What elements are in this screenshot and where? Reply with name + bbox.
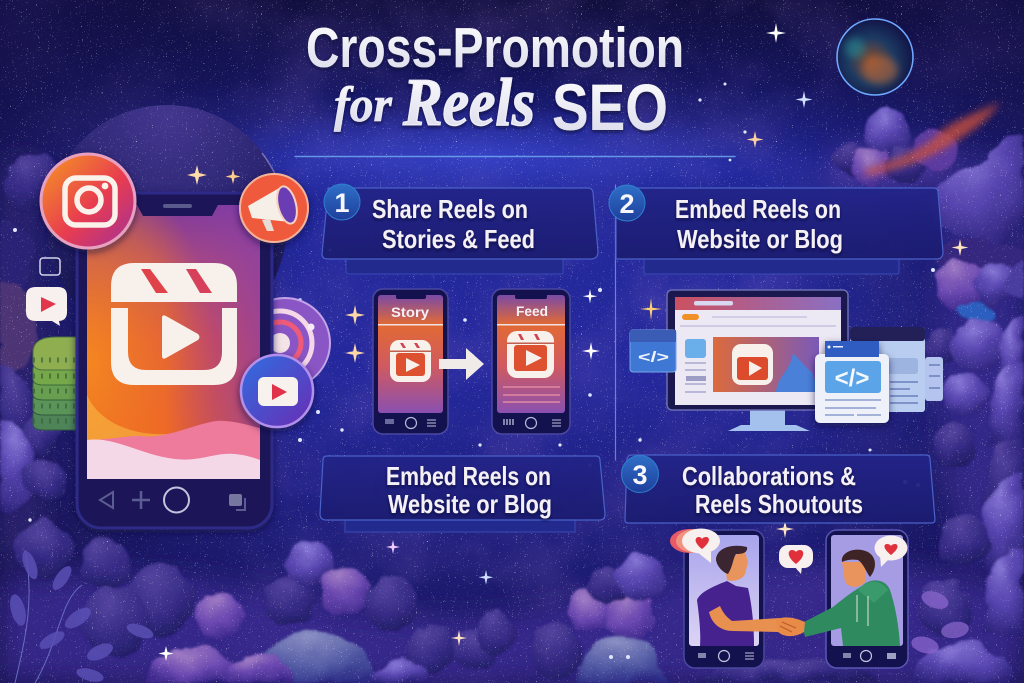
- feed phone: [492, 289, 570, 434]
- story phone: Story: [391, 304, 429, 320]
- phone screen artwork: [87, 205, 260, 479]
- icon: Instagram badge: [41, 154, 135, 248]
- planet behind the phone: [47, 105, 287, 345]
- handshake: [776, 617, 805, 636]
- title: for: [334, 76, 393, 132]
- badge 2: [609, 185, 645, 221]
- icon: coin stack: [33, 337, 78, 430]
- icon: purple target disc: [240, 298, 330, 388]
- panel: embed reels (left column): [320, 456, 605, 532]
- heart speech bubbles: [670, 528, 908, 574]
- monitor stand: [728, 410, 810, 431]
- clouds: upper right: [833, 108, 1024, 285]
- small moon planet: [837, 19, 913, 95]
- clouds: right side: [912, 259, 1024, 683]
- title: Reels: [402, 64, 535, 140]
- left collaboration phone: [684, 530, 764, 668]
- embedded reels icon: [732, 344, 773, 385]
- panel 2: embed reels on website or blog: [609, 185, 943, 274]
- orange nebula streak: [865, 102, 1000, 176]
- center bubble: [779, 545, 813, 574]
- heading: Embed Reels on: [386, 461, 551, 491]
- panel 3: collaborations and shoutouts: [622, 455, 935, 523]
- phone nav bar: [100, 488, 245, 512]
- title: SEO: [552, 70, 668, 144]
- heading: Website or Blog: [388, 489, 552, 519]
- arrow: story to feed: [439, 348, 484, 380]
- Reels logo: [111, 263, 237, 385]
- icon: play chat bubble: [26, 287, 67, 326]
- stacked left bubble: [670, 528, 720, 563]
- mini reels icon: [390, 340, 431, 382]
- heading 1: [372, 194, 535, 254]
- code document: [815, 341, 889, 423]
- badge 3: 3: [632, 460, 648, 490]
- icon: megaphone badge: [240, 174, 308, 242]
- badge 1: 1: [334, 188, 350, 218]
- heading 2: [675, 194, 843, 254]
- person in purple shirt: [697, 546, 780, 646]
- clouds: left side: [0, 152, 68, 512]
- feed phone: Feed: [516, 303, 548, 319]
- clouds: bottom band: [17, 520, 880, 683]
- heading 2: Website or Blog: [677, 224, 843, 254]
- left code tab: </>: [638, 349, 669, 366]
- foliage: bottom right: [909, 588, 970, 656]
- back document: [850, 327, 943, 412]
- heading: [386, 461, 552, 519]
- notch speaker: [163, 204, 192, 208]
- badge 2: 2: [619, 189, 635, 219]
- mini reels icon: [507, 331, 554, 378]
- website page: [675, 297, 841, 405]
- cloud masses: soft base glow: [0, 149, 1024, 683]
- heading 3: [682, 461, 863, 519]
- heading 3: Reels Shoutouts: [695, 489, 863, 519]
- right collaboration phone: [826, 530, 908, 668]
- divider lines: [295, 156, 735, 460]
- code document: </>: [835, 365, 869, 392]
- icon: video badge: [241, 355, 313, 427]
- right bubble: [874, 536, 908, 567]
- badge 1: [324, 184, 360, 220]
- left code tab: [630, 330, 676, 372]
- panel 1: share reels on stories and feed: [322, 184, 598, 274]
- heading 2: Embed Reels on: [675, 194, 841, 224]
- title: [306, 16, 684, 144]
- heading 3: Collaborations &: [682, 461, 856, 491]
- icon: window outline: [40, 258, 60, 275]
- badge 3: [622, 456, 658, 492]
- monitor illustration: [630, 290, 943, 431]
- title: Cross-Promotion: [306, 16, 684, 80]
- foliage: bottom left: [7, 549, 155, 683]
- heading 1: Share Reels on: [372, 194, 528, 224]
- person in green hoodie: [802, 550, 900, 646]
- story phone: [373, 289, 448, 434]
- heading 1: Stories & Feed: [382, 224, 535, 254]
- main phone with Reels screen: [77, 193, 272, 528]
